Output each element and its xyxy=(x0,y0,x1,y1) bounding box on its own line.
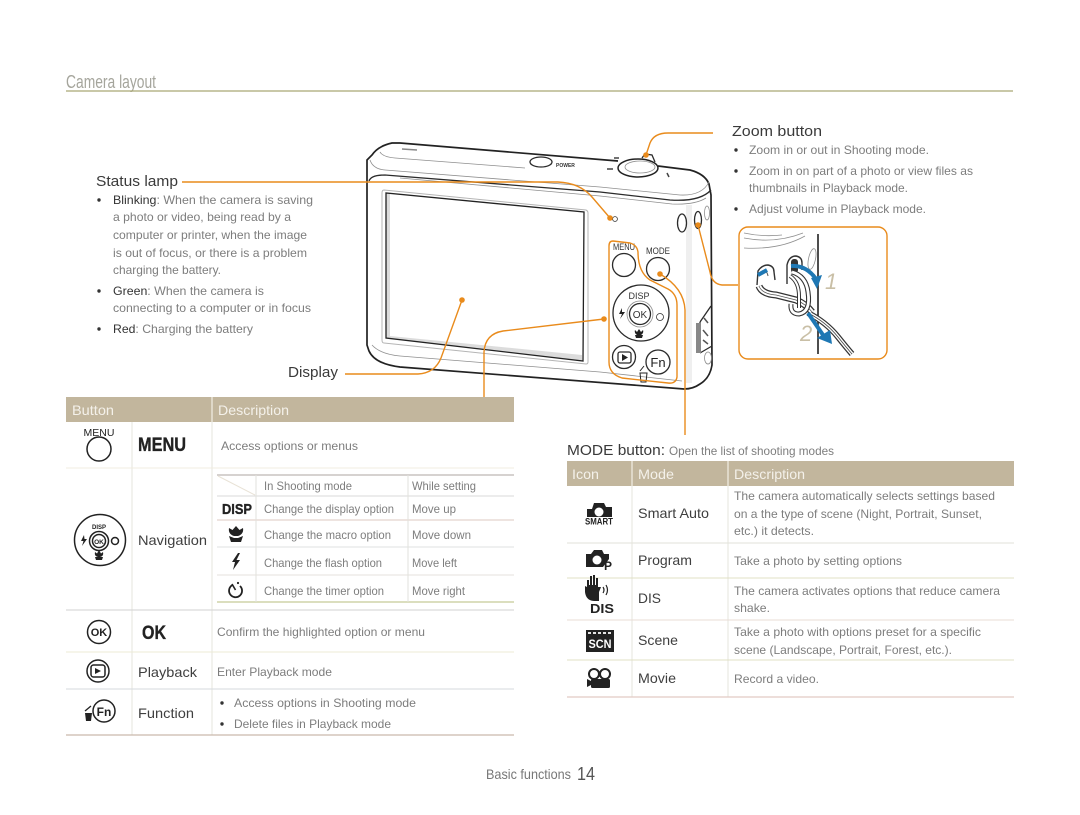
side door xyxy=(700,306,712,353)
row: ok: OK xyxy=(142,623,166,644)
row: ok xyxy=(88,620,425,644)
row: menu: Access options or menus xyxy=(221,439,358,453)
text block: zoom button: Adjust volume in Playback mode. xyxy=(749,202,926,216)
row: dis: The camera activates options that reduce camera xyxy=(734,584,1000,598)
strap lugs xyxy=(678,214,686,232)
icon: clapperboard: SCN xyxy=(588,637,612,651)
table: shooting modes xyxy=(567,461,1014,697)
row: program: Take a photo by setting options xyxy=(734,554,902,568)
icon: navigation dial: DISP xyxy=(92,525,106,531)
row: program xyxy=(586,550,902,573)
nested table: navigation actions: Change the macro option xyxy=(264,528,391,542)
label: display: Display xyxy=(288,364,339,381)
screen xyxy=(386,193,582,361)
table header: Description xyxy=(218,402,289,418)
row: scene: Take a photo with options preset for a specific xyxy=(734,625,981,639)
nested table: navigation actions: Change the flash option xyxy=(264,556,382,570)
camera buttons: Fn xyxy=(650,355,666,370)
nested table: navigation actions: Move left xyxy=(412,556,458,570)
row: dis: DIS xyxy=(638,590,661,606)
footer: page number: Basic functions xyxy=(486,766,571,782)
text block: status lamp: Green: When the camera is xyxy=(113,284,264,298)
row: scene: Scene xyxy=(638,632,678,648)
row: ok: Confirm the highlighted option or menu xyxy=(217,625,425,639)
row: scene xyxy=(586,625,981,657)
camera buttons xyxy=(612,242,670,382)
table header: Button xyxy=(72,402,114,418)
icon: steady hand: DIS xyxy=(590,601,614,616)
strap lug and cord xyxy=(757,256,852,354)
nested table: navigation actions: While setting xyxy=(412,479,476,493)
text block: zoom button xyxy=(732,123,973,216)
nested table: navigation actions: Move up xyxy=(412,502,456,516)
nested table: navigation actions: Change the display option xyxy=(264,502,394,516)
row: program: Program xyxy=(638,552,692,568)
row: smart auto: The camera automatically selects settings based xyxy=(734,489,995,503)
row: dis: shake. xyxy=(734,601,770,615)
orange outline around buttons xyxy=(609,241,677,383)
text block: status lamp: connecting to a computer or in focus xyxy=(113,301,311,315)
footer: page number xyxy=(486,764,595,784)
power button xyxy=(530,157,552,167)
camera buttons: MODE xyxy=(646,246,670,256)
row: menu xyxy=(84,427,358,461)
nested table: navigation actions: Move right xyxy=(412,584,466,598)
heading: mode button xyxy=(567,442,834,459)
row: movie xyxy=(587,669,819,688)
camera buttons: OK xyxy=(633,310,648,321)
row: function: Delete files in Playback mode xyxy=(234,717,391,731)
row: function: Access options in Shooting mode xyxy=(234,696,416,710)
icon: steady hand xyxy=(585,575,614,616)
camera body xyxy=(367,143,712,389)
camera body: POWER xyxy=(556,163,575,169)
nested table: navigation actions: In Shooting mode xyxy=(264,479,352,493)
icon: movie camera xyxy=(587,669,610,688)
text block: status lamp: Blinking: When the camera is saving xyxy=(113,193,313,207)
illustration: camera back xyxy=(367,143,712,389)
table header: Icon xyxy=(572,466,599,482)
text block: status lamp: Red: Charging the battery xyxy=(113,322,253,336)
row: movie: Record a video. xyxy=(734,672,819,686)
row: playback xyxy=(87,660,332,682)
row: function: Fn xyxy=(97,705,111,719)
strap arrow 2 xyxy=(808,313,832,344)
table header: Mode xyxy=(638,466,674,482)
row: movie: Movie xyxy=(638,670,676,686)
icon: macro xyxy=(229,526,243,542)
footer: page number: 14 xyxy=(577,764,595,784)
text block: zoom button: Zoom in or out in Shooting mode. xyxy=(749,143,929,157)
row: navigation xyxy=(74,475,514,602)
text block: status lamp xyxy=(96,173,313,336)
icon: navigation dial xyxy=(74,514,126,566)
nested table: navigation actions: DISP xyxy=(222,501,252,518)
title: Camera layout xyxy=(66,72,156,92)
icon: timer xyxy=(229,582,242,597)
icon: clapperboard xyxy=(586,630,614,652)
heading: mode button: MODE button: xyxy=(567,442,665,459)
icon: program camera xyxy=(586,550,612,573)
zoom dial xyxy=(642,154,655,162)
text block: zoom button: Zoom in on part of a photo or view files as xyxy=(749,164,973,178)
icon: smart camera xyxy=(585,503,613,528)
leader: strap xyxy=(695,222,738,285)
row: smart auto: on a the type of scene (Night, Portrait, Sunset, xyxy=(734,507,982,521)
icon: program camera: P xyxy=(604,559,612,573)
row: smart auto xyxy=(585,489,995,538)
text block: status lamp: a photo or video, being read by a xyxy=(113,210,291,224)
text block: zoom button: Zoom button xyxy=(732,123,822,140)
row: function: Function xyxy=(138,705,194,721)
icon: smart camera: SMART xyxy=(585,516,613,528)
leader: display xyxy=(345,297,465,374)
nested table: navigation actions: Change the timer option xyxy=(264,584,384,598)
step number 1: 1 xyxy=(825,269,837,294)
table header xyxy=(567,461,1014,486)
table header xyxy=(66,397,514,422)
heading: mode button: Open the list of shooting modes xyxy=(669,444,834,458)
strap arrow 1 xyxy=(758,266,822,289)
table header: Description xyxy=(734,466,805,482)
text block: status lamp: charging the battery. xyxy=(113,263,221,277)
leader: zoom button xyxy=(643,133,713,158)
text block: status lamp: is out of focus, or there is a problem xyxy=(113,246,307,260)
row: smart auto: Smart Auto xyxy=(638,505,709,521)
row: function xyxy=(85,696,416,731)
text block: status lamp: Status lamp xyxy=(96,173,178,190)
camera buttons: DISP xyxy=(628,291,650,301)
row: navigation: Navigation xyxy=(138,532,207,548)
text block: status lamp: computer or printer, when the image xyxy=(113,228,307,242)
screen bezel xyxy=(382,190,588,364)
nested table: navigation actions xyxy=(217,475,514,602)
row: playback: Enter Playback mode xyxy=(217,665,332,679)
row: playback: Playback xyxy=(138,664,198,680)
row: smart auto: etc.) it detects. xyxy=(734,524,814,538)
leader: status lamp xyxy=(182,182,613,221)
camera buttons: MENU xyxy=(613,242,635,252)
icon: flash xyxy=(232,553,240,570)
row: ok: OK xyxy=(91,627,107,639)
inset: attaching the strap xyxy=(739,227,887,359)
step number 2: 2 xyxy=(799,321,812,346)
text block: zoom button: thumbnails in Playback mode. xyxy=(749,181,908,195)
nested table: navigation actions: Move down xyxy=(412,528,471,542)
icon: navigation dial: OK xyxy=(94,539,104,546)
row: dis xyxy=(585,575,1000,616)
row: scene: scene (Landscape, Portrait, Forest, etc.). xyxy=(734,643,952,657)
leader: mode button xyxy=(657,271,685,435)
row: menu: MENU xyxy=(138,435,186,456)
leader: navigation xyxy=(484,316,607,397)
row: menu: MENU xyxy=(84,427,114,439)
table: buttons xyxy=(66,397,514,735)
